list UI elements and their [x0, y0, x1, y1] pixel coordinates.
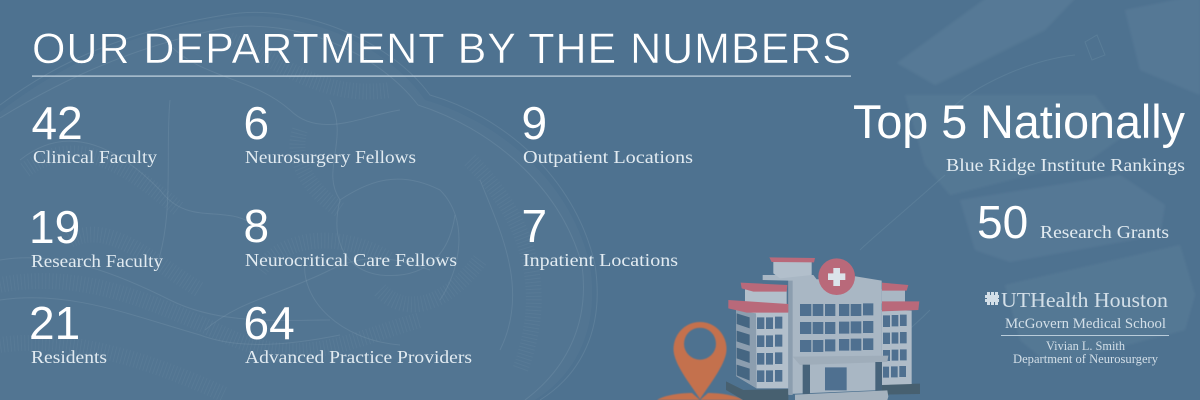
logo: UTHealth Houston McGovern Medical School	[985, 288, 1169, 366]
stat: neurocritical care fellows	[244, 200, 457, 270]
logo school name: McGovern Medical School	[1005, 316, 1166, 332]
background: brain illustration	[0, 12, 597, 400]
stat: residents	[29, 297, 107, 367]
stat: inpatient locations: Inpatient Locations	[523, 250, 678, 270]
title underline	[32, 76, 851, 77]
stat: research grants	[977, 196, 1169, 248]
logo wordmark: UTHealth Houston	[1001, 288, 1169, 312]
stat: research grants: 50	[977, 196, 1028, 248]
logo department line two: Department of Neurosurgery	[1013, 352, 1159, 366]
stat: research faculty: 19	[29, 201, 80, 253]
stat: neurosurgery fellows: Neurosurgery Fellows	[245, 147, 416, 167]
logo divider	[1001, 335, 1169, 336]
stat: outpatient locations: 9	[522, 97, 547, 149]
ranking source: Blue Ridge Institute Rankings	[946, 155, 1185, 175]
stat: inpatient locations: 7	[522, 200, 547, 252]
stat: advanced practice providers: 64	[244, 297, 295, 349]
ranking headline: Top 5 Nationally	[853, 95, 1185, 148]
icon: hospital building	[726, 257, 920, 400]
stat: advanced practice providers	[244, 297, 472, 367]
stat: research grants: Research Grants	[1040, 222, 1169, 242]
stat: clinical faculty: Clinical Faculty	[33, 147, 157, 167]
stat: neurosurgery fellows: 6	[244, 97, 269, 149]
stat: research faculty	[29, 201, 163, 271]
stat: neurosurgery fellows	[244, 97, 416, 167]
stat: outpatient locations: Outpatient Locations	[523, 147, 693, 167]
background: spine nerve strokes	[850, 35, 1105, 375]
stat: neurocritical care fellows: Neurocritical Care Fellows	[245, 250, 457, 270]
stat: neurocritical care fellows: 8	[244, 200, 269, 252]
stat: research faculty: Research Faculty	[31, 251, 163, 271]
stat: clinical faculty	[32, 97, 157, 167]
background: spine illustration	[897, 0, 1200, 365]
stat: outpatient locations	[522, 97, 693, 167]
stat: residents: Residents	[31, 347, 107, 367]
logo department name: Vivian L. Smith	[1046, 339, 1126, 353]
stat: clinical faculty: 42	[32, 97, 83, 149]
stat: advanced practice providers: Advanced Practice Providers	[245, 347, 472, 367]
logo mark	[985, 292, 999, 305]
title: OUR DEPARTMENT BY THE NUMBERS	[32, 25, 851, 73]
stat: inpatient locations	[522, 200, 678, 270]
stat: residents: 21	[29, 297, 80, 349]
icon: location pin	[657, 322, 743, 400]
